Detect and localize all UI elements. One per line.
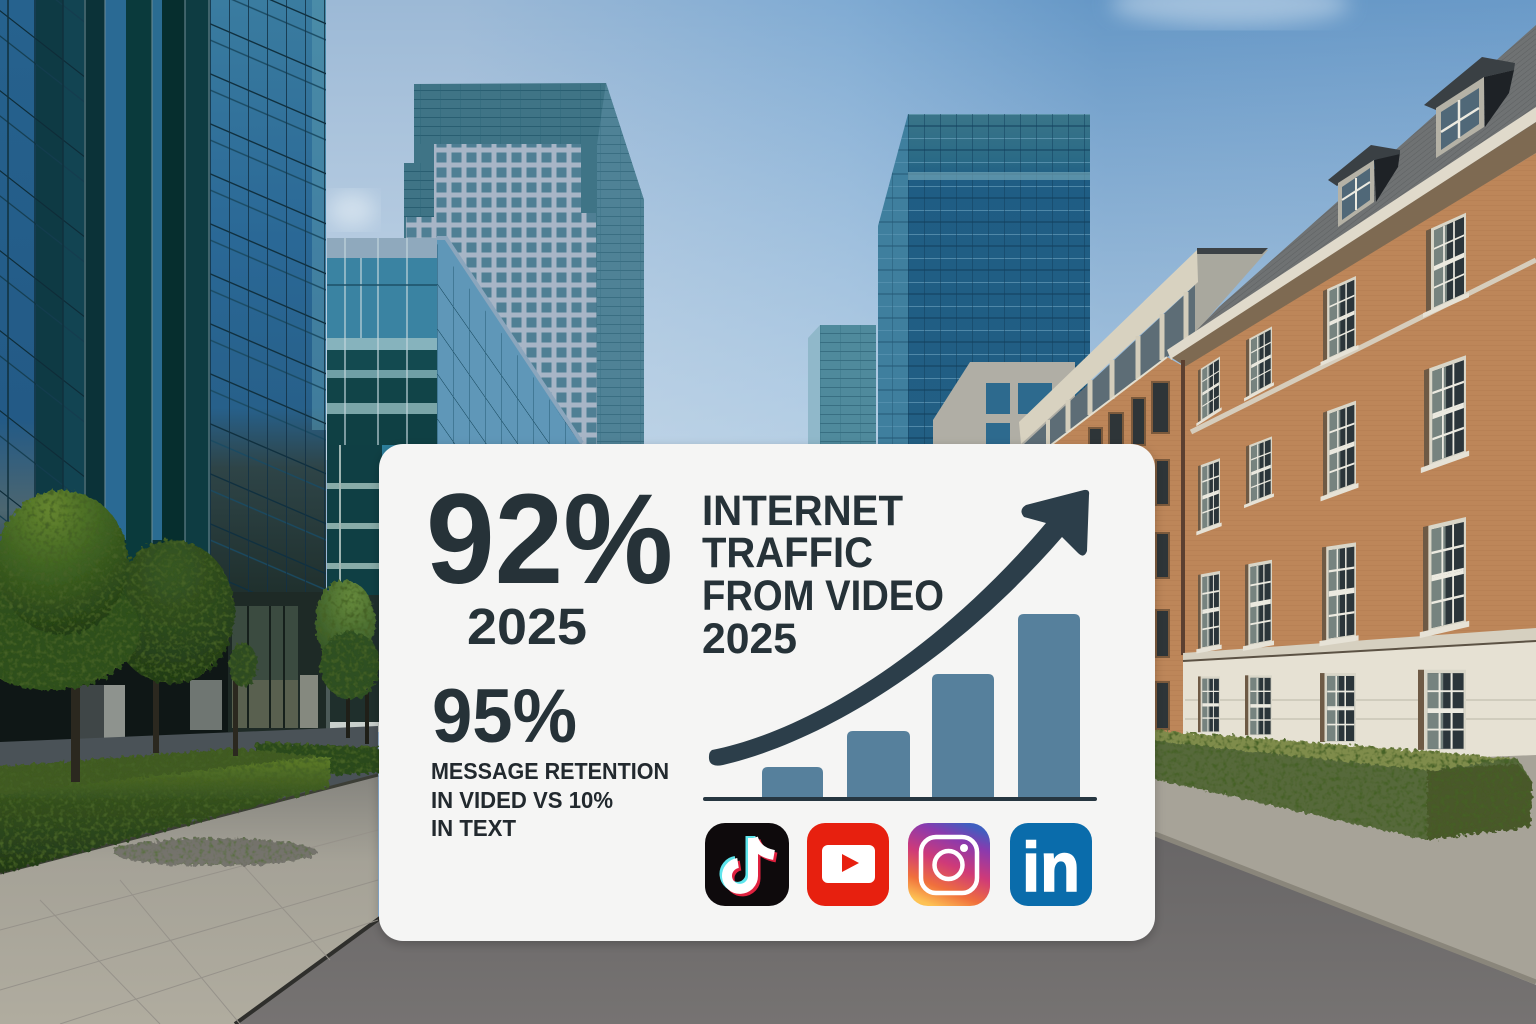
lobby base — [0, 590, 330, 750]
hedge: right — [1140, 729, 1533, 840]
stat: 92 percent: 92% — [426, 468, 673, 611]
stat: 95 percent: 95% — [432, 674, 577, 759]
building: left glass tower — [0, 0, 330, 750]
heading: internet traffic from video 2025: TRAFFIC — [702, 529, 873, 577]
panel: white stat card — [379, 444, 1155, 941]
dormers — [1328, 57, 1515, 227]
icon: tiktok — [705, 823, 789, 906]
building: small tower behind — [808, 325, 876, 445]
background: sky — [0, 0, 1536, 780]
facade section: left — [0, 0, 84, 600]
windows grid — [1423, 211, 1469, 318]
hedge: left — [0, 742, 390, 881]
text block: message retention: IN TEXT — [431, 815, 516, 841]
building: distant centre tower — [404, 83, 644, 445]
building: right glass tower — [878, 114, 1090, 445]
bar chart — [703, 614, 1097, 801]
facade section: right — [210, 0, 326, 600]
cloud: behind glass block — [328, 192, 376, 228]
building: mid-left glass block — [327, 238, 582, 732]
heading: internet traffic from video 2025: INTERNET — [702, 487, 903, 535]
heading: internet traffic from video 2025: 2025 — [702, 615, 797, 663]
heading: internet traffic from video 2025 — [702, 487, 944, 663]
text block: message retention — [431, 758, 669, 841]
icon: youtube — [807, 823, 889, 906]
text block: message retention: MESSAGE RETENTION — [431, 758, 669, 784]
arrow: rising trend — [709, 490, 1089, 766]
trees: left group — [0, 490, 380, 782]
facade section: dark columns — [84, 0, 210, 590]
cloud: upper right — [1110, 0, 1350, 26]
icon: instagram — [908, 823, 990, 906]
icon: linkedin: in — [1022, 828, 1080, 906]
building: cream wing — [1019, 248, 1268, 735]
building: brick block with slate roof — [1167, 25, 1536, 770]
text block: message retention: IN VIDED VS 10% — [431, 787, 613, 813]
ground: road and pavements — [0, 726, 1536, 1024]
building: low beige block — [933, 362, 1075, 445]
label: 2025: 2025 — [467, 598, 587, 655]
heading: internet traffic from video 2025: FROM VIDEO — [702, 572, 944, 620]
